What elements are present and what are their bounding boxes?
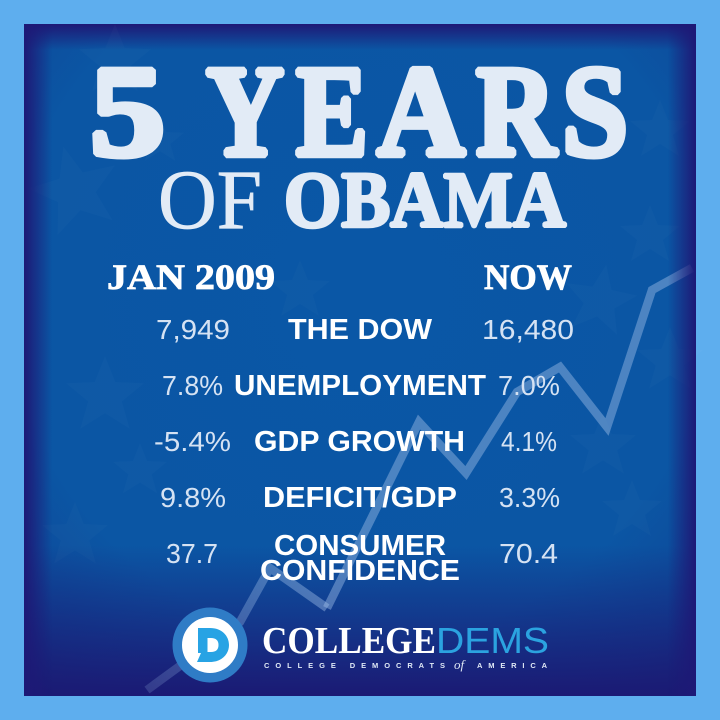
chart: rising trend line (147, 268, 692, 690)
logo tagline: COLLEGE DEMOCRATS (264, 661, 445, 670)
row: GDP Growth: GDP GROWTH (254, 426, 465, 458)
row: The Dow: THE DOW (288, 314, 432, 346)
logo wordmark: CollegeDems: COLLEGE (262, 620, 436, 662)
logo tagline: AMERICA (477, 661, 548, 670)
row: Unemployment: 7.0% (498, 370, 560, 401)
row: The Dow: 16,480 (482, 314, 574, 345)
row: Unemployment: UNEMPLOYMENT (234, 370, 487, 402)
row: Consumer Confidence: CONSUMER (274, 530, 446, 562)
logo tagline (264, 657, 548, 672)
title: OF OBAMA: OF (158, 153, 262, 247)
row: Deficit/GDP: 9.8% (160, 482, 226, 513)
title: 5 YEARS: A (377, 40, 465, 184)
logo tagline: of (454, 657, 466, 672)
row: Consumer Confidence: 70.4 (499, 538, 558, 569)
title: OF OBAMA (158, 153, 566, 247)
row: Consumer Confidence (166, 530, 558, 587)
title: 5 YEARS: R (476, 40, 558, 184)
row: Unemployment (162, 370, 560, 402)
row: Unemployment: 7.8% (162, 370, 223, 401)
logo wordmark: CollegeDems: DEMS (436, 620, 549, 661)
column heading: Now: NOW (484, 257, 572, 297)
row: Deficit/GDP (160, 482, 560, 514)
row: Consumer Confidence: CONFIDENCE (260, 555, 460, 587)
decorative stars (20, 24, 703, 564)
title: OF OBAMA: OBAMA (284, 158, 566, 244)
row: Deficit/GDP: 3.3% (499, 482, 560, 513)
title: 5 YEARS: S (562, 40, 628, 184)
row: Consumer Confidence: 37.7 (166, 538, 218, 569)
row: The Dow (156, 314, 574, 346)
row: The Dow: 7,949 (156, 314, 230, 345)
row: Deficit/GDP: DEFICIT/GDP (263, 482, 457, 514)
title: 5 YEARS: 5 (90, 40, 165, 184)
title: 5 YEARS: E (296, 40, 368, 184)
row: GDP Growth: 4.1% (501, 426, 557, 457)
row: GDP Growth (154, 426, 557, 458)
column heading: Jan 2009: JAN 2009 (107, 257, 275, 297)
logo wordmark: CollegeDems (262, 620, 549, 672)
title: 5 YEARS: Y (206, 40, 284, 184)
icon: Democrats D logo (172, 608, 248, 682)
row: GDP Growth: -5.4% (154, 426, 231, 457)
